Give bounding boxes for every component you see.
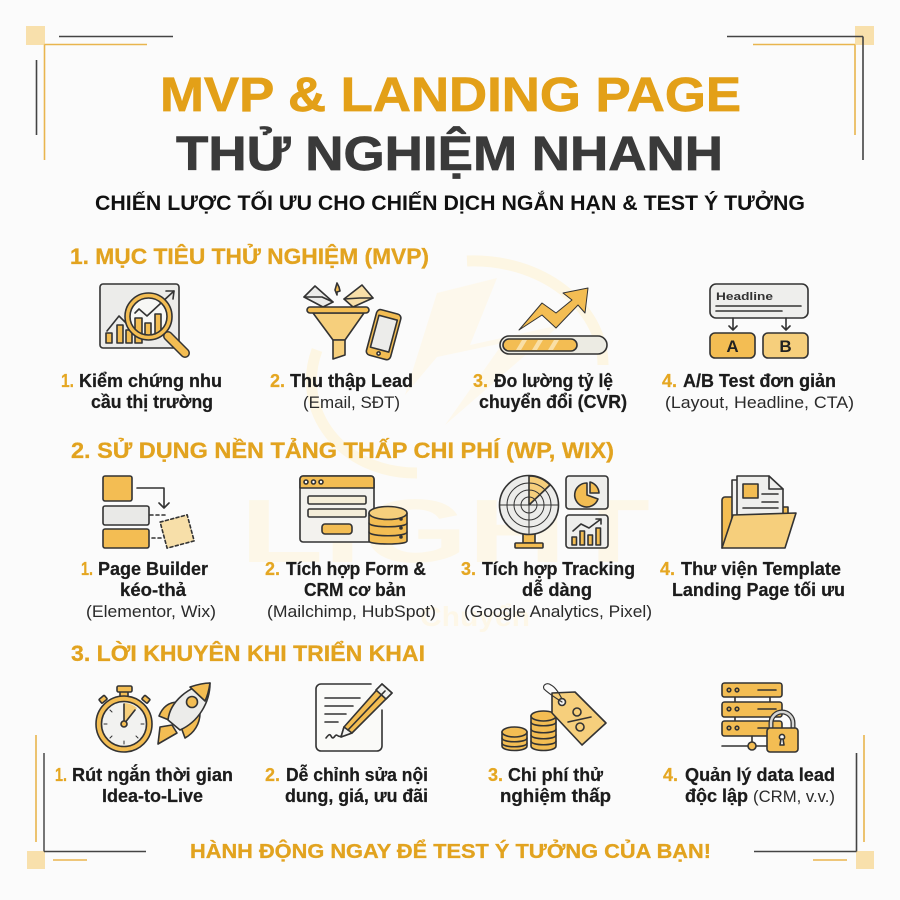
icon: A/B test layout	[710, 284, 808, 358]
icon: coins and price tag	[502, 684, 606, 750]
label: item 3.2: Dễ chỉnh sửa nội	[286, 764, 428, 785]
corner frame: top left	[26, 26, 173, 160]
watermark logo: Chuyển	[420, 601, 530, 632]
icon: A/B test layout: A	[726, 337, 739, 356]
heading: section 2: 2. SỬ DỤNG NỀN TẢNG THẤP CHI PHÍ (WP, WIX)	[71, 438, 614, 463]
label: item 3.3	[488, 765, 611, 806]
label: item 1.3: chuyển đổi (CVR)	[479, 392, 627, 412]
label: item 1.2: (Email, SĐT)	[303, 393, 400, 412]
label: item 2.1: Page Builder	[98, 559, 208, 579]
label: item 3.1	[55, 764, 233, 806]
label: item 2.4	[660, 559, 845, 600]
label: item 1.4: A/B Test đơn giản	[683, 371, 836, 391]
label: item 3.3: nghiệm thấp	[500, 786, 611, 806]
label: item 3.3: 3.	[488, 765, 503, 785]
label: item 2.4: 4.	[660, 559, 675, 579]
label: item 1.1: 1.	[61, 371, 74, 391]
watermark logo	[240, 261, 650, 632]
icon: document and pencil	[316, 684, 392, 751]
call to action footer: HÀNH ĐỘNG NGAY ĐỂ TEST Ý TƯỞNG CỦA BẠN!	[190, 839, 711, 863]
icon: radar tracking with report panels	[500, 476, 608, 548]
label: item 1.1	[61, 371, 222, 412]
label: item 1.2: Thu thập Lead	[290, 371, 413, 391]
icon: stopwatch and rocket	[96, 683, 210, 752]
label: item 1.3: Đo lường tỷ lệ	[494, 371, 613, 391]
label: item 3.4: độc lập	[685, 786, 748, 806]
label: item 1.2: 2.	[270, 371, 285, 391]
label: item 3.2: 2.	[265, 765, 280, 785]
label: item 1.1: cầu thị trường	[91, 392, 213, 412]
label: item 2.1: (Elementor, Wix)	[86, 602, 216, 621]
icon: conversion arrow and progress bar	[500, 288, 607, 354]
label: item 3.4	[663, 765, 835, 806]
icon: data server with padlock	[722, 683, 798, 752]
label: item 2.3: dễ dàng	[522, 579, 592, 600]
corner frame: top right	[727, 26, 874, 160]
label: item 3.1: 1.	[55, 765, 67, 785]
label: item 1.4: 4.	[662, 371, 677, 391]
label: item 2.4: Thư viện Template	[681, 559, 841, 579]
label: item 2.3: Tích hợp Tracking	[482, 559, 635, 579]
title: line 2: THỬ NGHIỆM NHANH	[176, 126, 723, 181]
icon: form window and CRM database	[300, 476, 407, 544]
label: item 3.4: Quản lý data lead	[685, 765, 835, 785]
label: item 2.3: (Google Analytics, Pixel)	[464, 602, 652, 621]
corner frame: bottom left	[27, 735, 146, 869]
subtitle: CHIẾN LƯỢC TỐI ƯU CHO CHIẾN DỊCH NGẮN HẠN & TEST Ý TƯỞNG	[95, 191, 805, 215]
label: item 1.1: Kiểm chứng nhu	[79, 371, 222, 391]
label: item 1.4	[662, 371, 854, 412]
label: item 1.3: 3.	[473, 371, 488, 391]
title: line 1: MVP & LANDING PAGE	[160, 69, 741, 122]
label: item 2.4: Landing Page tối ưu	[672, 580, 845, 600]
heading: section 1: 1. MỤC TIÊU THỬ NGHIỆM (MVP)	[70, 244, 429, 269]
label: item 1.4: (Layout, Headline, CTA)	[665, 393, 854, 412]
label: item 3.2	[265, 764, 428, 806]
corner frame: bottom right	[754, 735, 874, 869]
label: item 2.2: Tích hợp Form &	[286, 559, 426, 579]
icon: folder of landing page templates	[722, 476, 796, 548]
label: item 3.3: Chi phí thử	[508, 765, 604, 785]
label: item 3.4: 4.	[663, 765, 678, 785]
label: item 2.2: (Mailchimp, HubSpot)	[267, 602, 436, 621]
label: item 2.1	[81, 559, 216, 621]
label: item 2.3: 3.	[461, 559, 476, 579]
label: item 2.2	[265, 559, 436, 621]
icon: A/B test layout: B	[779, 337, 792, 356]
label: item 1.2	[270, 371, 413, 412]
watermark logo: LIGHT	[240, 482, 650, 582]
label: item 3.1: Idea-to-Live	[102, 786, 203, 806]
icon: A/B test layout: Headline	[716, 291, 773, 303]
label: item 1.3	[473, 371, 627, 412]
label: item 2.1: kéo-thả	[120, 580, 187, 600]
label: item 2.3	[461, 559, 652, 621]
label: item 2.2: 2.	[265, 559, 280, 579]
label: item 3.1: Rút ngắn thời gian	[72, 764, 233, 785]
label: item 2.1: 1.	[81, 559, 93, 579]
icon: market validation chart with magnifier	[100, 284, 185, 353]
label: item 2.2: CRM cơ bản	[304, 580, 406, 600]
heading: section 3: 3. LỜI KHUYÊN KHI TRIỂN KHAI	[71, 641, 425, 666]
icon: lead funnel with envelopes and phone	[304, 283, 402, 361]
label: item 3.4: (CRM, v.v.)	[753, 787, 835, 806]
icon: drag and drop page builder	[103, 476, 194, 548]
label: item 3.2: dung, giá, ưu đãi	[285, 786, 428, 806]
